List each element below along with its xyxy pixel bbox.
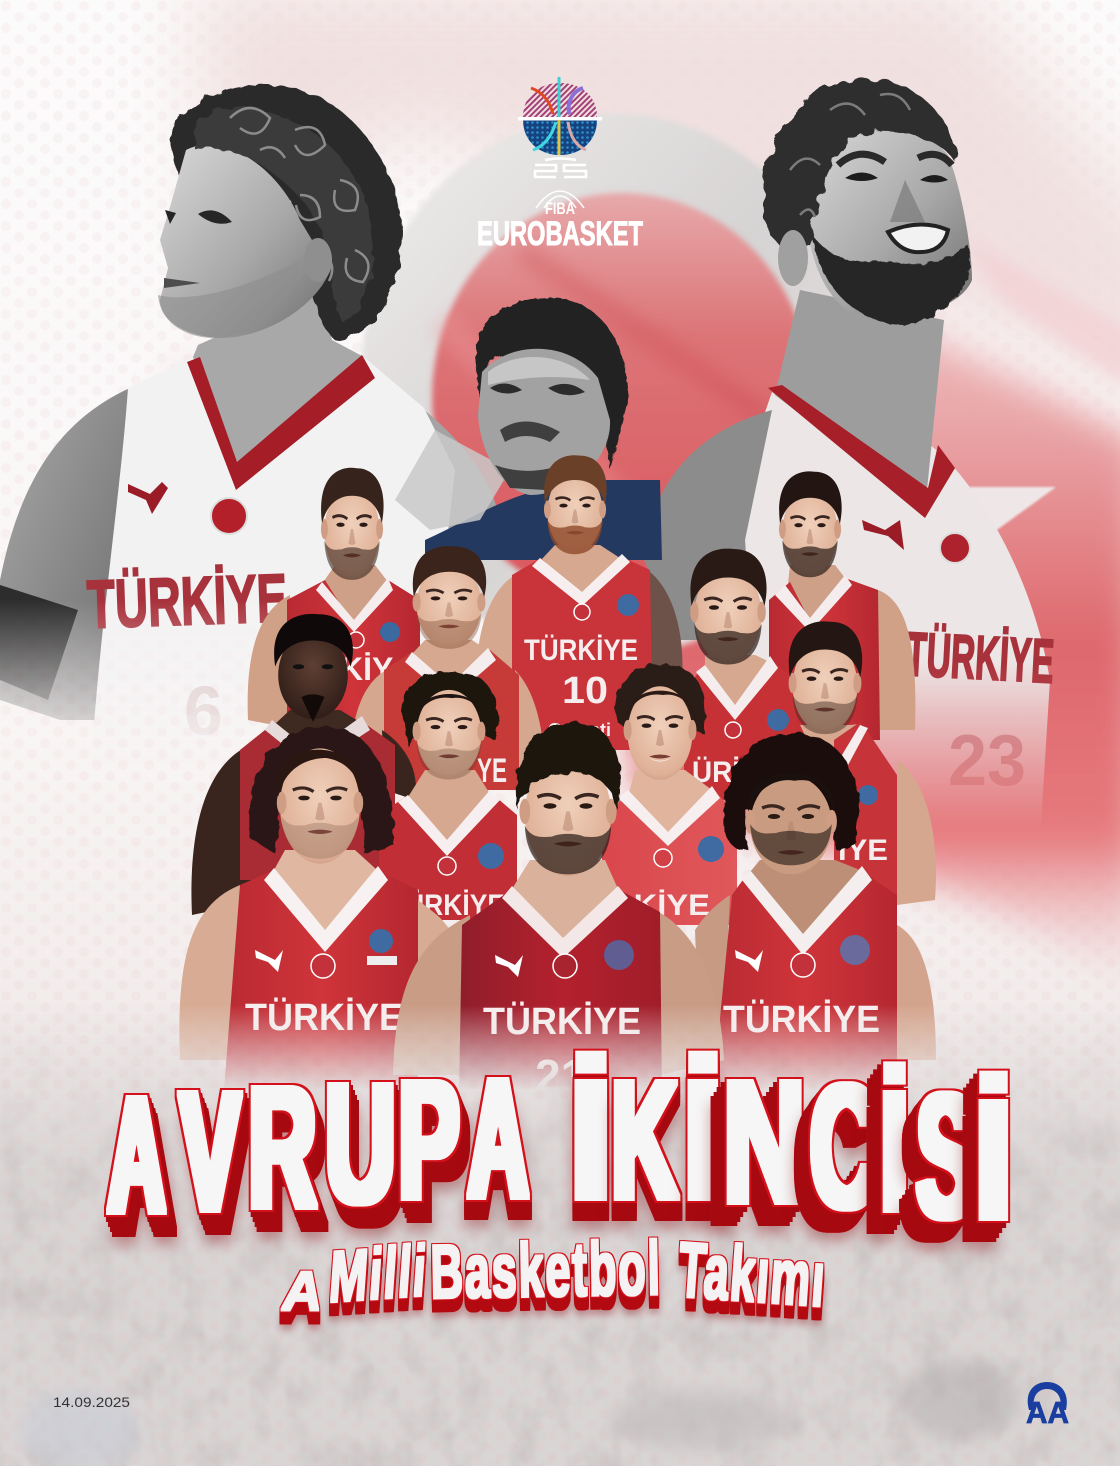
subtitle: A Milli Basketbol Takımı: Takımı [676,1227,829,1323]
national team group [179,455,936,1102]
flag: star [960,487,1056,535]
left player head [158,85,402,340]
neck [193,297,364,462]
title: Avrupa İkincisi: İ [880,1057,909,1247]
player number 10: 10 [562,670,608,712]
shirt [395,430,510,530]
player back left: KİY [340,651,393,687]
title: Avrupa İkincisi: İ [972,1066,1014,1254]
subtitle: A Milli Basketbol Takımı: A [278,1260,331,1322]
player front left [179,728,450,1090]
title: Avrupa İkincisi: R [248,1050,316,1244]
jersey text: TÜRKİYE [86,560,288,643]
dark arm band [0,585,78,700]
eyes [165,210,232,224]
player curly left center [379,672,517,922]
left arm [0,388,130,720]
crowd background [0,1000,1120,1466]
forehead light [488,357,590,385]
title: Avrupa İkincisi: İ [567,1045,615,1234]
ball bar [518,117,602,120]
hair back [170,85,402,340]
ball lower half [523,120,597,155]
player front centre [393,723,724,1102]
player back right [769,471,915,740]
date: 14.09.2025 [53,1394,130,1410]
player curly left center: ÜRKİYE [405,889,505,922]
jersey number: 6 [184,672,223,750]
player right [789,621,936,915]
flag: red field [160,0,1120,1000]
title: Avrupa İkincisi: U [325,1049,396,1239]
ball arcs [531,77,586,155]
player front left: TÜRKİYE [245,996,403,1039]
white jersey [94,358,455,720]
player middle right [684,549,796,800]
stubble [158,260,300,338]
ear [304,238,332,282]
red collar [187,355,375,490]
player front centre: 21 [535,1050,586,1102]
title: Avrupa İkincisi: İ [681,1046,725,1234]
player back left [248,468,420,760]
jersey logo mark [862,520,904,550]
curl highlights [230,108,368,282]
subtitle: A Milli Basketbol Takımı: Basketbol [430,1226,662,1315]
face [478,349,610,495]
player middle right: ÜRİ [692,756,740,789]
subtitle: A Milli Basketbol Takımı [278,1226,829,1323]
hair [475,298,628,470]
hair highlights [790,94,910,217]
right player head [764,79,972,325]
player front centre: TÜRKİYE [483,1000,641,1043]
face [160,145,330,338]
player dark skinned [191,614,416,915]
player curly right center [602,664,737,925]
face [806,130,972,317]
player front right: TÜRKİYE [723,998,880,1041]
right arm [380,405,500,640]
player portrait: right black and white [644,290,1056,840]
player front right [695,733,936,1090]
mouth [164,278,200,288]
left arm [644,410,772,640]
brows [838,154,952,165]
Anadolu Agency logo: AA [1026,1395,1069,1430]
EUROBASKET wordmark: EUROBASKET [477,215,643,253]
player portrait: left black and white [0,297,496,736]
coach [395,298,662,560]
title: Avrupa İkincisi: C [810,1048,879,1244]
nose [890,180,925,222]
crest [940,533,970,563]
hair front curls [195,109,373,325]
red collar [768,385,955,518]
flag: crescent [360,113,860,657]
jersey logo mark [128,482,168,514]
jersey white [700,392,1050,840]
player middle left [350,546,545,790]
title: Avrupa İkincisi: P [399,1045,459,1234]
title: Avrupa İkincisi: S [916,1056,975,1255]
smile [888,224,948,252]
moustache and goatee [495,421,570,490]
subtitle: A Milli Basketbol Takımı: Milli [327,1229,431,1318]
jersey number: 23 [948,721,1026,801]
arc over FIBA [536,191,584,208]
player number 10: Garanti [548,720,611,740]
title: Avrupa İkincisi: A [108,1061,165,1248]
title: Avrupa İkincisi: K [612,1045,677,1234]
eyes [845,172,948,182]
player middle left: YE [477,752,507,790]
ball stand 25 [535,158,586,177]
ball upper half [523,83,597,117]
hair [764,79,958,250]
neck [775,290,944,510]
title: Avrupa İkincisi: V [180,1056,240,1246]
player curly right center: RKİYE [610,889,710,922]
ear [778,230,808,286]
eyes and brows [490,383,585,395]
title: Avrupa İkincisi: N [723,1046,805,1240]
player number 10: TÜRKİYE [524,634,638,667]
jacket [425,480,662,560]
player number 10 [476,455,682,750]
beard [812,235,970,325]
title: Avrupa İkincisi [108,1045,1014,1255]
crest [211,498,247,534]
player right: İYE [838,834,888,867]
FIBA EuroBasket logo [477,77,643,253]
title: Avrupa İkincisi: A [468,1045,528,1234]
FIBA wordmark: FIBA [545,199,575,218]
